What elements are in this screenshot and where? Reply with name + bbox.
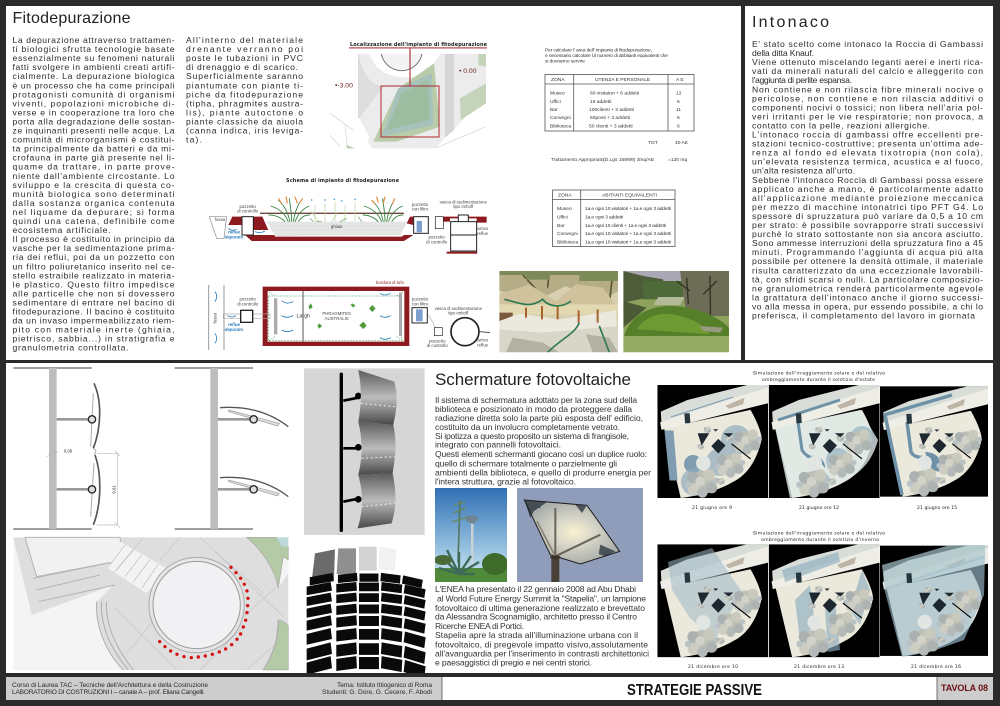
table: abitanti equivalenti per zona: Museo <box>557 206 572 212</box>
text block: intonaco description: l'aggiunta di perlite espansa. <box>752 75 852 85</box>
text block: intonaco description: stazioni tecnico-costruttive; presenta un'ottima ade- <box>752 139 983 149</box>
text block: intonaco description: per mezzo di macchine intonatrici tipo PFT G4. Lo <box>752 202 983 212</box>
table: calcolo abitanti equivalenti: 6 <box>677 115 680 121</box>
table: calcolo abitanti equivalenti: Trattamento Appropriato <box>551 157 604 163</box>
table: calcolo abitanti equivalenti: TOT <box>648 140 658 146</box>
text block: intonaco description: risulta caratterizzato da una eccezzionale lavorabili- <box>752 265 983 275</box>
render: 21 dicembre ore 10: 21 dicembre ore 10 <box>688 664 738 670</box>
panel: Schermature fotovoltaiche text <box>434 370 651 667</box>
text block: intonaco description: E' stato scelto come intonaco la Roccia di Gambassi <box>752 39 983 49</box>
text block: depurazione column 1: munità biologica sono determinati <box>12 189 175 199</box>
text block: depurazione column 1: sedimentare di entrare nel bacino di <box>12 298 175 308</box>
text block: intonaco description: Sono ammesse interruzioni della spruzzatura fino a 45 <box>752 238 983 248</box>
footer: course information: LABORATORIO DI COSTRUZIONI I – canale A – prof. Eliana Cangelli. <box>12 689 205 696</box>
text block: intonaco description: pericolose, non contiene e non rilascia additivi o <box>752 93 983 103</box>
table: calcolo abitanti equivalenti: si dovranno servire <box>545 58 585 64</box>
plan drawing: pozzetto <box>429 338 446 343</box>
text block: depurazione column 1: ria dei reflui, poi da un pozzetto con <box>12 252 175 262</box>
section drawing <box>209 197 489 254</box>
section drawing: reflue <box>477 231 489 236</box>
text block: sistema di schermatura: Il sistema di schermatura adottato per la zona sud della <box>435 395 637 405</box>
text block: depurazione column 1: comunità di microrganismi è costitui- <box>12 135 175 145</box>
text block: depurazione column 1: pito con materiale inerte (ghiaia, <box>12 325 174 335</box>
text block: sistema di schermatura: quello di schermare totalmente o parzielmente gli <box>435 458 617 468</box>
text block: depurazione column 2: poste le tubazioni in PVC <box>186 53 303 63</box>
plan drawing: fossa <box>213 313 218 323</box>
heading: Fitodepurazione: Fitodepurazione <box>12 10 131 27</box>
panel: simulazione solstizio d'estate: Simulazione dell'irraggiamento solare e del relativo <box>753 370 885 376</box>
footer: project information: Studenti: G. Dore, G. Cecere, F. Abodi <box>322 689 433 696</box>
text block: intonaco description <box>752 39 983 320</box>
text block: depurazione column 1: vasche per la sedimentazione prima- <box>12 243 175 253</box>
plan drawing: reflue <box>228 322 240 327</box>
table: calcolo abitanti equivalenti: 60 visitatori + 6 addetti <box>590 90 639 96</box>
text block: depurazione column 1: viventi, popolazioni microbiche di- <box>12 98 175 108</box>
text block: depurazione column 1: alle particelle che non si dovessero <box>12 288 175 298</box>
text block: Stapelia ENEA: L'ENEA ha presentato il 22 gennaio 2008 ad Abu Dhabi <box>435 584 636 594</box>
text block: Stapelia ENEA: Ricerche ENEA di Portici. <box>435 621 524 631</box>
text block: intonaco description: Sebbene l'intonaco Roccia di Gambassi possa essere <box>752 175 983 185</box>
text block: depurazione column 2: drenante verranno poi <box>186 44 303 54</box>
render: 21 dicembre ore 13 <box>769 544 880 670</box>
footer: project information <box>322 682 433 696</box>
footer title: Strategie passive: STRATEGIE PASSIVE <box>627 682 762 699</box>
text block: depurazione column 2 <box>186 35 303 145</box>
text block: intonaco description: minuti. Programmando l'aggiunta di acqua più alta <box>752 247 983 257</box>
text block: sistema di schermatura: costituito da un involucro completamente vetrato. <box>435 422 620 432</box>
render: 21 giugno ore 15 <box>880 386 988 511</box>
section drawing: con filtro <box>412 207 429 212</box>
text block: depurazione column 1: ta principalmente da batteri e da mi- <box>12 144 175 154</box>
plan drawing: di controllo <box>237 301 259 306</box>
render: 21 giugno ore 15: 21 giugno ore 15 <box>917 505 957 511</box>
text block: depurazione column 1: crofauna in parte già presente nel li- <box>12 153 175 163</box>
table: calcolo abitanti equivalenti: Museo <box>550 90 565 96</box>
text block: sistema di schermatura: l'intera struttura, grazie al fotovoltaico. <box>435 476 576 486</box>
diagram: schema di impianto, section and plan: Schema di impianto di fitodepurazione <box>286 178 400 184</box>
plan drawing: pozzetto <box>239 297 256 302</box>
render: 21 dicembre ore 16 <box>880 545 988 670</box>
table: calcolo abitanti equivalenti: Biblioteca <box>550 124 571 130</box>
text block: Stapelia ENEA: all'avanguardia per l'inserimento in contrasti architettonici <box>435 648 649 658</box>
text block: intonaco description: contatto con la pelle, reazioni allergiche. <box>752 120 930 130</box>
text block: depurazione column 1: ecosistema artificiale. <box>12 225 110 235</box>
section: pannelli verticali: 0,61 <box>112 485 117 494</box>
text block: intonaco description: ne granulometrica renderà particolarmente agevole <box>752 283 983 293</box>
text block: sistema di schermatura: Si ipotizza a questo proposito un sistema di frangisole, <box>435 431 629 441</box>
map: localizzazione dell'impianto: • 0.00 <box>459 68 477 75</box>
text block: sistema di schermatura: biblioteca e posizionato in modo da proteggere dalla <box>435 404 632 414</box>
text block: depurazione column 2: piante classiche da aiuola <box>186 116 303 126</box>
render: 21 giugno ore 9 <box>657 385 768 511</box>
text block: sistema di schermatura <box>435 395 651 486</box>
photo: lampione fotovoltaico Stapelia <box>517 488 643 582</box>
footer label: Tavola 08: TAVOLA 08 <box>941 683 988 693</box>
render: pannello fotovoltaico <box>304 368 425 535</box>
table: calcolo abitanti equivalenti: UTENZA E PERSONALE <box>595 77 651 83</box>
text block: depurazione column 2: (tipha, phragmites austra- <box>186 98 303 108</box>
plan drawing: vasca di sedimentazione <box>435 306 483 311</box>
table: calcolo abitanti equivalenti: Per calcolare l' area dell' impianto di fitodepurazione, <box>545 48 652 54</box>
heading: Intonaco: Intonaco <box>752 14 829 31</box>
text block: depurazione column 1: protagonisti comunità di organismi <box>12 89 175 99</box>
table: calcolo abitanti equivalenti: 11 <box>676 107 681 113</box>
plan: schermature attorno alla biblioteca <box>13 537 288 670</box>
table: calcolo abitanti equivalenti: 40 AE <box>675 140 689 146</box>
diagram: schema di impianto, section and plan <box>209 178 729 352</box>
text block: depurazione column 1: La depurazione attraverso trattamen- <box>12 35 175 45</box>
plan drawing: pozzetto <box>412 297 429 302</box>
panel: simulazione solstizio d'estate: ombreggiamento durante il solstizio d'estate <box>762 377 875 383</box>
plan drawing: depurato <box>225 327 244 332</box>
table: calcolo abitanti equivalenti <box>545 48 694 163</box>
render: 21 giugno ore 9: 21 giugno ore 9 <box>692 505 732 511</box>
render: 21 dicembre ore 10 <box>657 544 768 670</box>
text block: intonaco description: Non contiene e non rilascia fibre minerali nocive o <box>752 84 983 94</box>
text block: sistema di schermatura: Questi elementi schermanti giocano così un duplice ruolo: <box>435 449 647 459</box>
text block: depurazione column 2: piantumate con piante ti- <box>186 80 303 90</box>
footer: project information: Tema: Istituto Ittiogenico di Roma <box>337 682 432 689</box>
table: abitanti equivalenti per zona: 1a.e ogni 3 addetti <box>585 214 623 220</box>
text block: depurazione column 1: sviluppo e la crescita di questa co- <box>12 180 175 190</box>
plan drawing <box>209 280 490 350</box>
section: pannelli verticali <box>13 368 120 529</box>
text block: sistema di schermatura: ambienti della biblioteca, e quello di produrre energia per <box>435 467 651 477</box>
text block: depurazione column 2: All'interno del materiale <box>186 35 303 45</box>
panel: Intonaco <box>752 14 983 320</box>
map: localizzazione dell'impianto: •-3.00 <box>335 82 353 90</box>
plan drawing: reflue <box>477 343 489 348</box>
text block: depurazione column 1: ze inquinanti presenti nelle acque. La <box>12 126 175 136</box>
section drawing: di controllo <box>426 239 448 244</box>
text block: Stapelia ENEA: Stapelia apre la strada all'illuminazione urbana con il <box>435 630 638 640</box>
plan drawing: PHRAGMITES <box>322 311 351 316</box>
table: calcolo abitanti equivalenti: Uffici <box>550 99 561 105</box>
table: calcolo abitanti equivalenti: =120 mq <box>668 157 687 163</box>
text block: intonaco description: applicato anche a mano, è particolarmente adatto <box>752 184 983 194</box>
plan drawing: con filtro <box>412 301 429 306</box>
text block: depurazione column 1: un filtro poliuretanico inserito nel ce- <box>12 261 175 271</box>
text block: depurazione column 2: di drenaggio e di scarico. <box>186 62 298 72</box>
table: calcolo abitanti equivalenti: (D.Lgs 159/99) 3mq/AE <box>603 157 655 163</box>
text block: depurazione column 2: piche da fitodepurazione <box>186 89 303 99</box>
text block: intonaco description: Viene ottenuto miscelando leganti aerei e inerti rica- <box>752 57 983 67</box>
text block: sistema di schermatura: radiazione diretta solo la parte più esposta dell' edificio, <box>435 413 643 423</box>
text block: depurazione column 1: fitodepurazione. Il bacino è costituito <box>12 306 175 316</box>
section drawing: vasca di sedimentazione <box>440 199 488 204</box>
section drawing: tipo imhoff <box>453 204 474 209</box>
text block: Stapelia ENEA: fotovoltaico, di pregevole impatto visivo,assolutamente <box>435 639 648 649</box>
text block: Stapelia ENEA: da Alessandra Scognamiglio, architetto presso il Centro <box>435 612 637 622</box>
text block: depurazione column 1: essenzialmente su fenomeni naturali <box>12 53 175 63</box>
table: calcolo abitanti equivalenti: 50 clienti + 3 addetti <box>589 124 633 130</box>
footer: course information: Corso di Laurea TAC – Tecniche dell'Architettura e della Costruzione <box>12 682 208 689</box>
text block: Stapelia ENEA: e paesaggistici di pregio e nei centri storici. <box>435 657 592 667</box>
text block: depurazione column 2: (canna indica, iris leviga- <box>186 126 303 136</box>
text block: intonaco description: la grattatura dell'intonaco anche il giorno successi- <box>752 292 983 302</box>
section drawing: ghiaia <box>331 224 343 229</box>
plan drawing: tipo imhoff <box>448 311 469 316</box>
table: calcolo abitanti equivalenti: Convegni <box>550 115 571 121</box>
text block: depurazione column 1: Il processo è costituito in principio da <box>12 234 175 244</box>
text block: intonaco description: renza al fondo ed elevata tixotropia (non cola), <box>752 148 983 158</box>
panel: simulazione solstizio d'inverno: Simulazione dell'irraggiamento solare e del relativo <box>753 530 885 536</box>
render: 21 giugno ore 12: 21 giugno ore 12 <box>799 505 839 511</box>
table: abitanti equivalenti per zona: ZONA <box>558 192 572 198</box>
section drawing: depurato <box>225 234 244 239</box>
heading: Schermature fotovoltaiche: Schermature fotovoltaiche <box>435 370 631 389</box>
text block: sistema di schermatura: integrato con pannelli fotovoltaici. <box>435 439 561 449</box>
render: 21 dicembre ore 13: 21 dicembre ore 13 <box>794 664 844 670</box>
text block: depurazione column 1: niente dall'ambiente circostante. Lo <box>12 171 175 181</box>
map: localizzazione dell'impianto: Localizzazione dell'impianto di fitodepurazione <box>350 42 488 48</box>
table: calcolo abitanti equivalenti: e necessario calcolare l,il numero di abbitanti equivalenti che <box>545 53 668 59</box>
text block: Stapelia ENEA: al World Future Energy Summit la "Stapelia", un lampione <box>437 593 646 603</box>
section: pannelli verticali: 0,06 <box>64 448 73 453</box>
table: calcolo abitanti equivalenti: 12 <box>676 90 682 96</box>
table: abitanti equivalenti per zona: ABITANTI EQUIVALENTI <box>602 192 657 198</box>
text block: depurazione column 1: granulometria controllata. <box>12 343 128 353</box>
section drawing: pozzetto <box>412 202 429 207</box>
table: abitanti equivalenti per zona <box>552 190 675 246</box>
render: schermature dall'alto <box>307 537 426 679</box>
text block: intonaco description: componenti nocivi o tossici; non libera nell'aria pol- <box>752 102 983 112</box>
table: calcolo abitanti equivalenti: 5 <box>677 99 680 105</box>
render: 21 dicembre ore 16: 21 dicembre ore 16 <box>911 664 961 670</box>
photo: bacino vegetato <box>623 271 729 352</box>
text block: depurazione column 1: le plastico. Questo filtro impedisce <box>12 279 175 289</box>
text block: intonaco description: possibile per ottenere la densità ottimale, il materiale <box>752 256 983 266</box>
table: calcolo abitanti equivalenti: 100clienti + 3 addetti <box>589 107 634 113</box>
text block: depurazione column 2: Superficialmente saranno <box>186 71 303 81</box>
text block: depurazione column 1 <box>12 35 175 353</box>
photo: Stapelia tra le agavi <box>435 488 507 582</box>
plan drawing: Largh <box>297 314 310 320</box>
text block: intonaco description: vati da minerali naturali del calcio e alleggerito con <box>752 66 983 76</box>
table: abitanti equivalenti per zona: Biblioteca <box>557 239 578 245</box>
plan drawing: bordura di tufo <box>376 280 405 285</box>
text block: depurazione column 1: stello estraibile realizzato in materia- <box>12 270 175 280</box>
plan drawing: arrivo <box>477 338 489 343</box>
text block: intonaco description: spessore di spruzzatura può variare da 0,5 a 10 cm <box>752 211 983 221</box>
table: calcolo abitanti equivalenti: Bar <box>550 107 558 113</box>
text block: Stapelia ENEA: fotovoltaico di ultima generazione realizzato e brevettato <box>435 603 645 613</box>
text block: depurazione column 1: cialmente. La depurazione biologica <box>12 71 175 81</box>
text block: intonaco description: tà, con sfridi scarsi o nulli. La particolare composizio- <box>752 274 983 284</box>
text block: Stapelia ENEA <box>435 584 649 667</box>
table: calcolo abitanti equivalenti: 6 <box>677 124 680 130</box>
table: abitanti equivalenti per zona: Convegni <box>557 231 578 237</box>
table: calcolo abitanti equivalenti: 50posti + 3 addetti <box>590 115 630 121</box>
text block: depurazione column 1: quame da trattare, in parte prove- <box>12 162 175 172</box>
table: calcolo abitanti equivalenti: A E <box>676 77 684 83</box>
photo: bacino in costruzione <box>499 271 618 352</box>
text block: depurazione column 1: da un invaso impermeabilizzato riem- <box>12 316 175 326</box>
section drawing: reflue <box>228 229 240 234</box>
section drawing: di controllo <box>237 209 259 214</box>
table: calcolo abitanti equivalenti: 15 addetti <box>590 99 611 105</box>
text block: intonaco description: della ditta Knauf. <box>752 48 814 58</box>
table: calcolo abitanti equivalenti: ZONA <box>551 77 565 83</box>
text block: intonaco description: un'alta resistenza all'urto. <box>752 166 855 176</box>
plan drawing: AUSTRALIS <box>325 316 349 321</box>
text block: depurazione column 1: porta alla degradazione delle sostan- <box>12 116 175 126</box>
text block: intonaco description: un'elevata resistenza termica, acustica e al fuoco, <box>752 157 983 167</box>
render: 21 giugno ore 12 <box>1 1 880 511</box>
text block: depurazione column 1: verse e in cooperazione tra loro che <box>12 107 175 117</box>
footer: course information <box>12 682 208 696</box>
text block: intonaco description: all'applicazione mediante proiezione meccanica <box>752 193 983 203</box>
text block: depurazione column 1: quindi una catena, definibile come <box>12 216 175 226</box>
footer <box>0 673 1000 706</box>
plan drawing: di controllo <box>427 343 448 348</box>
text block: intonaco description: vo alla messa in opera, pur essendo possibile, a chi lo <box>752 302 983 312</box>
panel: simulazione solstizio d'inverno <box>657 530 988 670</box>
text block: depurazione column 1: nel liquame da depurare; si forma <box>12 207 175 217</box>
section drawing: fossa <box>215 217 226 222</box>
text block: intonaco description: L'intonaco roccia di gambassi offre eccellenti pre- <box>752 130 983 140</box>
text block: depurazione column 1: fatti svolgere in ambienti creati artifi- <box>12 62 175 72</box>
table: abitanti equivalenti per zona: Uffici <box>557 214 568 220</box>
text block: depurazione column 2: lis), piante autoctone o <box>186 107 303 117</box>
section: pannelli inclinati <box>175 368 288 529</box>
table: abitanti equivalenti per zona: 1a.e ogni 10 visitatori + 1a.e ogni 3 addetti <box>585 239 671 245</box>
panel: simulazione solstizio d'estate <box>1 1 988 511</box>
text block: intonaco description: preferisca, il completamento del lavoro in giornata <box>752 310 975 320</box>
text block: depurazione column 1: è un processo che ha come principali <box>12 80 175 90</box>
panel: simulazione solstizio d'inverno: ombreggiamento durante il solstizio d'inverno <box>761 537 879 543</box>
table: abitanti equivalenti per zona: 1a.e ogni 10 visitatori + 1a.e ogni 3 addetti <box>585 206 671 212</box>
map: localizzazione dell'impianto <box>330 29 488 148</box>
panel: Schermature fotovoltaiche drawings <box>13 368 426 679</box>
text block: depurazione column 1: dalla sostanza organica contenuta <box>12 198 175 208</box>
table: abitanti equivalenti per zona: Bar <box>557 223 565 229</box>
section drawing: pozzetto <box>239 204 256 209</box>
table: abitanti equivalenti per zona: 1a.e ogni 10 visitatori + 1a.e ogni 3 addetti <box>585 231 671 237</box>
text block: depurazione column 1: pietrisco, sabbia...) in stratigrafia e <box>12 334 175 344</box>
section drawing: pozzetto <box>428 235 445 240</box>
section drawing: arrivo <box>477 226 489 231</box>
text block: intonaco description: purchè lo strato sottostante non sia ancora asciutto. <box>752 229 983 239</box>
text block: depurazione column 1: ti biologici sfrutta tecnologie basate <box>12 44 175 54</box>
text block: intonaco description: veri irritanti per le vie respiratorie; non provoca, a <box>752 111 983 121</box>
text block: depurazione column 2: ta). <box>186 135 202 145</box>
text block: intonaco description: per strato: è possibile sovrapporre strati successivi <box>752 220 983 230</box>
table: abitanti equivalenti per zona: 1a.e ogni 10 clienti + 1a.e ogni 3 addetti <box>585 223 666 229</box>
